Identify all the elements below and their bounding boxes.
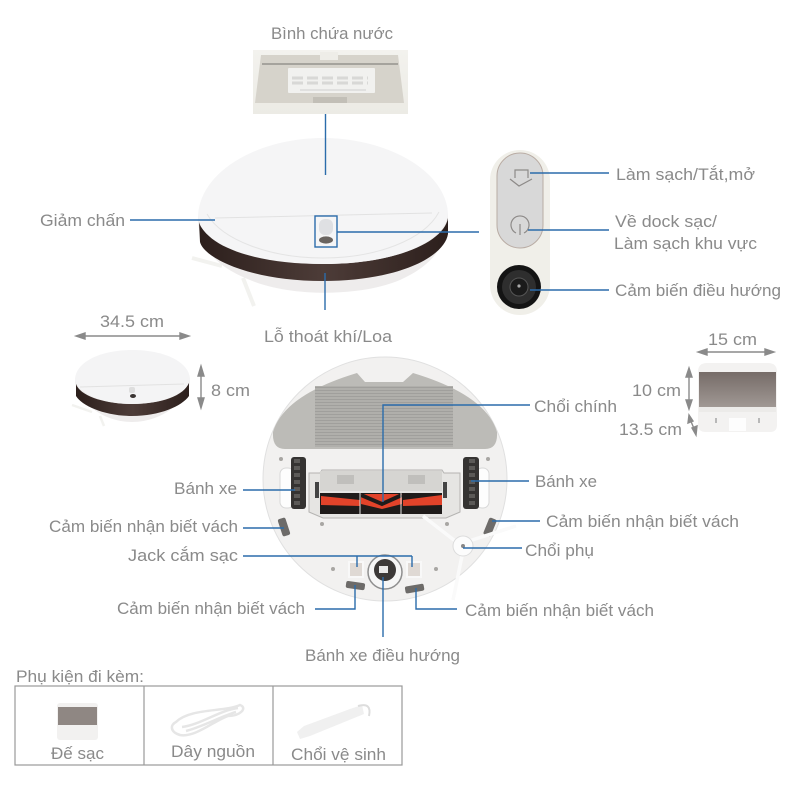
accessory label: cleaning tool: Chổi vệ sinh: [291, 745, 386, 764]
cliff sensors: [277, 517, 497, 594]
label: clean on off: Làm sạch/Tắt,mở: [616, 165, 755, 184]
label: 15 cm: 15 cm: [708, 330, 757, 349]
heading: water tank: Bình chứa nước: [271, 24, 393, 43]
arrow: dock depth 13.5 cm: [688, 415, 697, 435]
right wheel: [463, 457, 489, 509]
accessories table: [15, 686, 402, 765]
accessory: charging dock: [57, 703, 98, 740]
accessory label: cable: Dây nguồn: [171, 742, 255, 761]
label: lower left sensor: Cảm biến nhận biết vách: [117, 599, 305, 618]
main robot top view: [192, 138, 448, 306]
label: return to dock: Về dock sạc/: [615, 212, 717, 231]
left wheel: [280, 457, 306, 509]
charging contacts: [349, 562, 421, 577]
water tank photo: [253, 50, 408, 114]
label: main brush: Chổi chính: [534, 397, 617, 416]
label: left wall sensor: Cảm biến nhận biết vách: [49, 517, 238, 536]
label: lower right sensor: Cảm biến nhận biết vách: [465, 601, 654, 620]
arrow: dock height 10 cm: [686, 368, 692, 409]
icon: clean button: [510, 170, 532, 186]
label: right wheel: Bánh xe: [535, 472, 597, 491]
accessory label: dock: Đế sạc: [51, 744, 104, 763]
label: navigation sensor: Cảm biến điều hướng: [615, 281, 781, 300]
label: bumper: Giảm chấn: [40, 211, 125, 230]
robot control panel: [319, 219, 333, 244]
icon: dock button: [511, 216, 529, 235]
small robot with dimensions: [72, 350, 190, 426]
accessory: power cable: [172, 705, 243, 735]
label: return to dock: [614, 212, 757, 253]
label: left wheel: Bánh xe: [174, 479, 237, 498]
arrow: dock width 15 cm: [698, 349, 774, 355]
side brush: [423, 516, 516, 600]
label: caster wheel: Bánh xe điều hướng: [305, 646, 460, 665]
label: 10 cm: 10 cm: [632, 381, 681, 400]
label: right wall sensor: Cảm biến nhận biết vách: [546, 512, 739, 531]
label: air outlet / speaker: Lỗ thoát khí/Loa: [264, 327, 393, 346]
callout frame: control panel: [315, 216, 337, 247]
label: side brush: Chổi phụ: [525, 541, 594, 560]
label: charging jack: Jack cắm sạc: [128, 546, 239, 565]
label: 34.5 cm: 34.5 cm: [100, 312, 164, 331]
label: 8 cm: 8 cm: [211, 381, 250, 400]
accessory: cleaning tool: [297, 705, 370, 739]
leader lines: underside: [243, 405, 540, 637]
mop pad: [273, 373, 497, 449]
leader lines: main robot: [130, 114, 479, 310]
main brush bay: [309, 470, 460, 518]
heading: accessories: Phụ kiện đi kèm:: [16, 667, 144, 686]
arrow: width 34.5 cm: [76, 333, 189, 339]
robot underside: [263, 357, 516, 601]
screws: [279, 457, 490, 571]
arrow: height 8 cm: [198, 366, 204, 408]
charging dock: [698, 363, 777, 432]
control panel enlarged: [490, 150, 550, 315]
label: 13.5 cm: 13.5 cm: [619, 420, 682, 439]
icon: navigation camera: [497, 265, 541, 309]
label: return to dock: Làm sạch khu vực: [614, 234, 757, 253]
leader lines: control panel: [528, 173, 609, 290]
caster wheel: [368, 555, 402, 589]
